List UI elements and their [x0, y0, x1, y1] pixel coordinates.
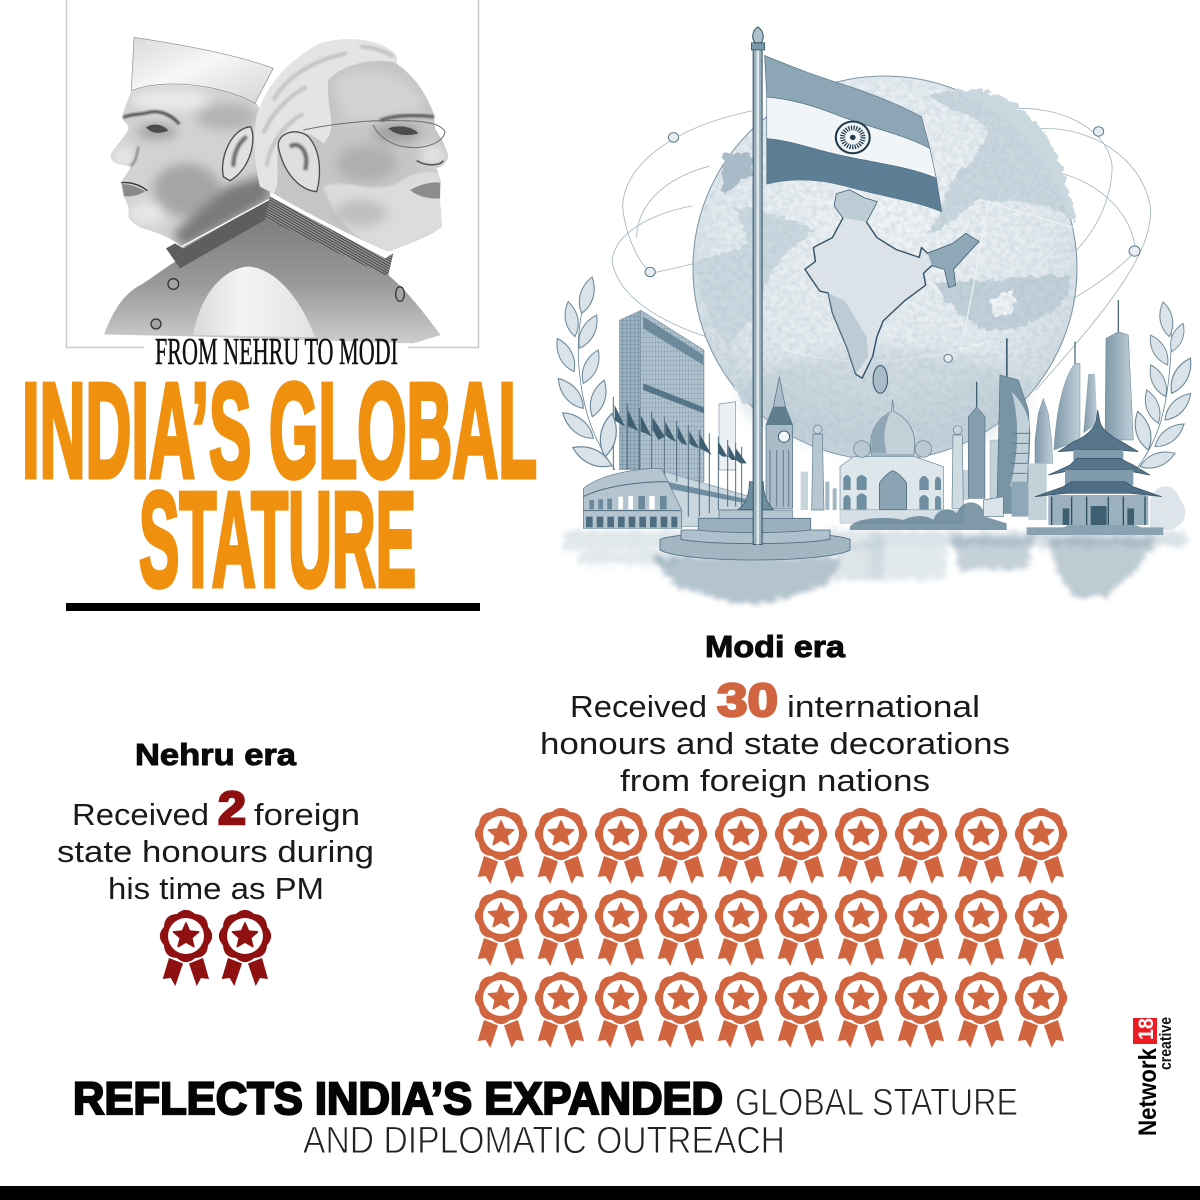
skyline towers — [963, 300, 1133, 520]
Nehru era description: his time as PM — [108, 871, 324, 906]
logo: Network18 creative: 18 — [1135, 1018, 1158, 1040]
conclusion text: GLOBAL STATURE — [735, 1082, 1018, 1124]
row of flags — [613, 397, 747, 517]
Nehru era description: state honours during — [57, 834, 374, 869]
globe and orbit layer — [612, 76, 1151, 460]
India map — [805, 190, 979, 393]
small towers and minaret — [801, 425, 837, 510]
right landmarks — [840, 300, 1197, 597]
illustration: Nehru and Modi portraits — [104, 33, 453, 343]
panel: portrait frame — [66, 0, 478, 348]
flagpole and Indian flag — [751, 27, 942, 545]
Nehru era description: Received — [72, 797, 209, 832]
illustration: flag, globe and world landmarks — [552, 27, 1197, 603]
panel: Modi era — [474, 629, 1068, 1048]
Modi era heading: Modi era — [705, 629, 846, 664]
icon row: 2 medals — [159, 909, 272, 986]
infographic canvas: INDIA’S GLOBAL — [22, 355, 537, 506]
Ashoka chakra — [836, 122, 870, 153]
Indian flag — [765, 55, 942, 212]
laurel left — [552, 275, 619, 472]
Modi hair — [254, 39, 397, 193]
conclusion text: AND DIPLOMATIC OUTREACH — [303, 1120, 785, 1162]
icon grid: 30 medals — [474, 807, 1068, 1048]
Modi era description — [540, 674, 1010, 798]
white kurta — [193, 267, 315, 337]
Taj Mahal — [840, 399, 963, 523]
logo: Network18 creative: Network — [1134, 1048, 1162, 1136]
globe — [693, 76, 1077, 460]
jackets — [104, 198, 441, 343]
title rule — [66, 603, 480, 611]
laurel right — [1131, 301, 1197, 473]
Nehru eye, brow and lips — [121, 112, 179, 196]
flagpole platform — [660, 482, 850, 560]
title — [22, 355, 537, 615]
Nehru ear — [223, 127, 253, 181]
panel: Nehru era — [57, 737, 374, 986]
Modi era description: Received — [570, 689, 707, 724]
Modi ear — [278, 132, 320, 192]
Modi collar — [265, 197, 393, 275]
Modi eye, brow and glasses — [303, 115, 445, 165]
trees — [850, 502, 1007, 530]
logo: Network18 creative — [1133, 1017, 1175, 1136]
subtitle: FROM NEHRU TO MODI — [155, 331, 398, 373]
bottom bar — [0, 1186, 1200, 1200]
low buildings — [983, 497, 1003, 517]
Nehru cap — [131, 37, 273, 103]
conclusion text — [73, 1073, 1018, 1162]
continents — [695, 89, 1075, 404]
Nehru era heading: Nehru era — [135, 737, 297, 772]
flagpole — [751, 27, 765, 545]
conclusion text: REFLECTS INDIA’S EXPANDED — [73, 1073, 723, 1124]
Modi era description: 30 — [717, 674, 778, 726]
globe texture — [694, 77, 1076, 459]
water reflections right — [870, 532, 1187, 597]
Modi era description: honours and state decorations — [540, 726, 1010, 761]
Modi era description: from foreign nations — [620, 763, 930, 798]
orbit nodes — [645, 127, 1140, 362]
Modi face — [258, 60, 448, 252]
pagoda — [1027, 410, 1163, 535]
Colosseum — [583, 468, 682, 528]
Modi era description: international — [787, 689, 980, 724]
left landmarks — [552, 275, 883, 603]
Nehru era description: foreign — [254, 797, 360, 832]
water reflections left — [563, 531, 883, 603]
side tree — [1150, 486, 1185, 530]
Modi mouth — [410, 182, 440, 198]
title: STATURE — [139, 464, 416, 615]
right minaret — [952, 426, 963, 508]
Nehru era description — [57, 782, 374, 906]
Nehru collar — [166, 198, 270, 268]
UN building — [619, 310, 750, 527]
jacket buttons — [151, 279, 404, 329]
orbit lines — [612, 108, 1151, 390]
Nehru era description: 2 — [218, 782, 246, 834]
Nehru face — [110, 85, 270, 248]
Modi beard — [323, 172, 443, 253]
logo: Network18 creative: creative — [1156, 1017, 1175, 1070]
Big Ben — [766, 377, 793, 508]
